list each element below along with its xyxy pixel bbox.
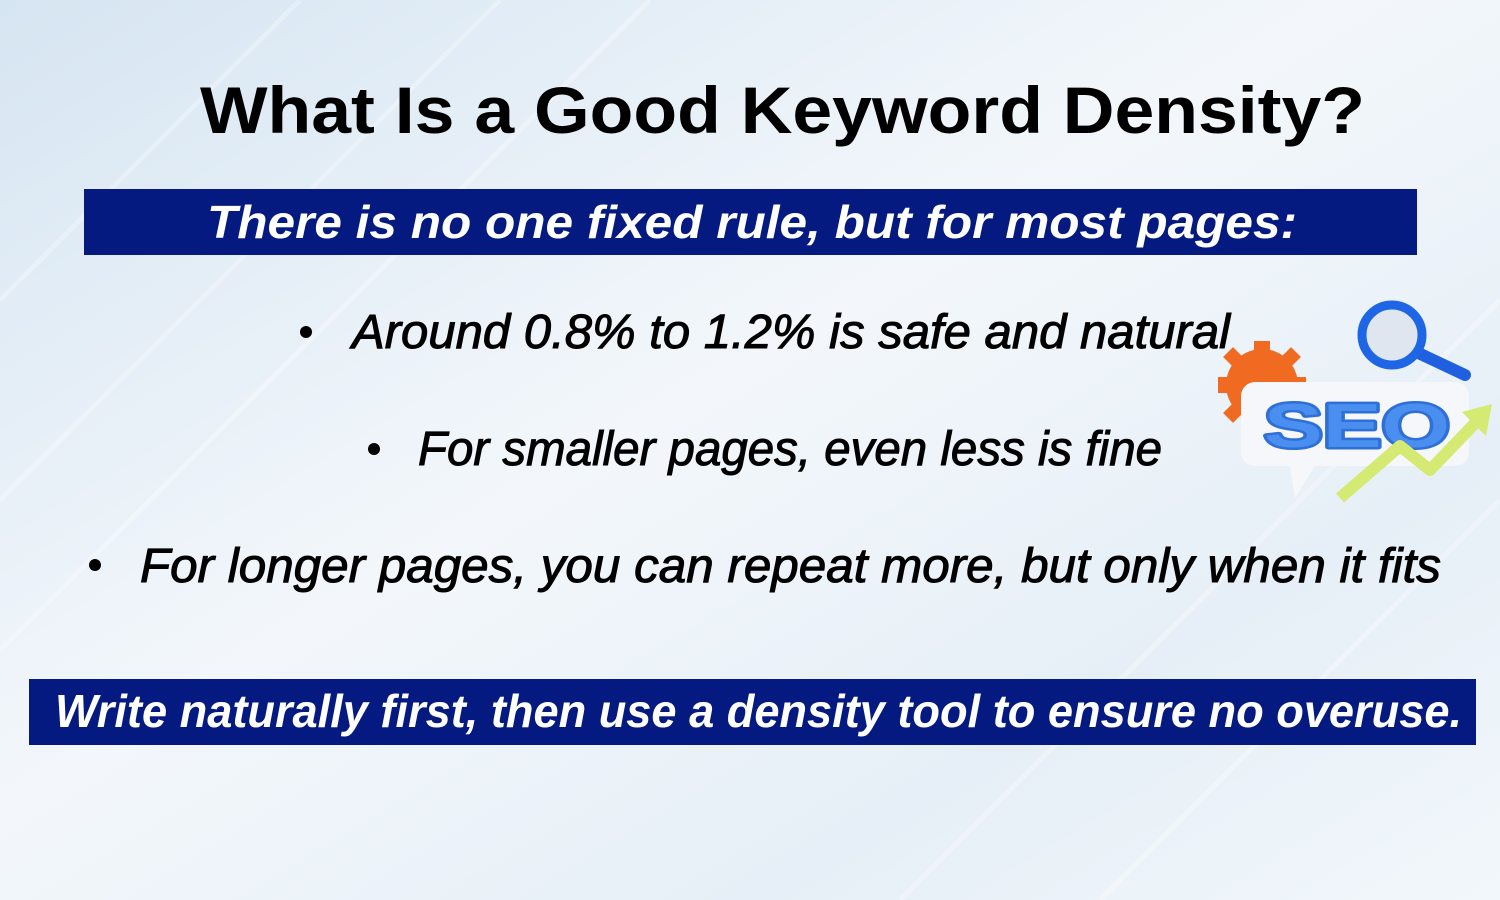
icon: SEO [1218, 305, 1492, 498]
icon: arrow [1340, 404, 1492, 498]
bullet 1: Around 0.8% to 1.2% is safe and natural [349, 306, 1231, 359]
icon: magnifier [1362, 305, 1465, 375]
icon: SEO letters: SEO [1264, 392, 1450, 461]
icon: gear [1218, 341, 1306, 429]
title: What Is a Good Keyword Density? [200, 73, 1365, 147]
icon: speech bubble [1241, 382, 1469, 498]
bullet 3: For longer pages, you can repeat more, but only when it fits [140, 540, 1441, 593]
banner: subtitle [84, 189, 1417, 255]
bullet 2: For smaller pages, even less is fine [418, 423, 1162, 476]
banner: bottom tip: Write naturally first, then use a density tool to ensure no overuse. [55, 685, 1462, 737]
banner: subtitle: There is no one fixed rule, but for most pages: [207, 196, 1297, 248]
